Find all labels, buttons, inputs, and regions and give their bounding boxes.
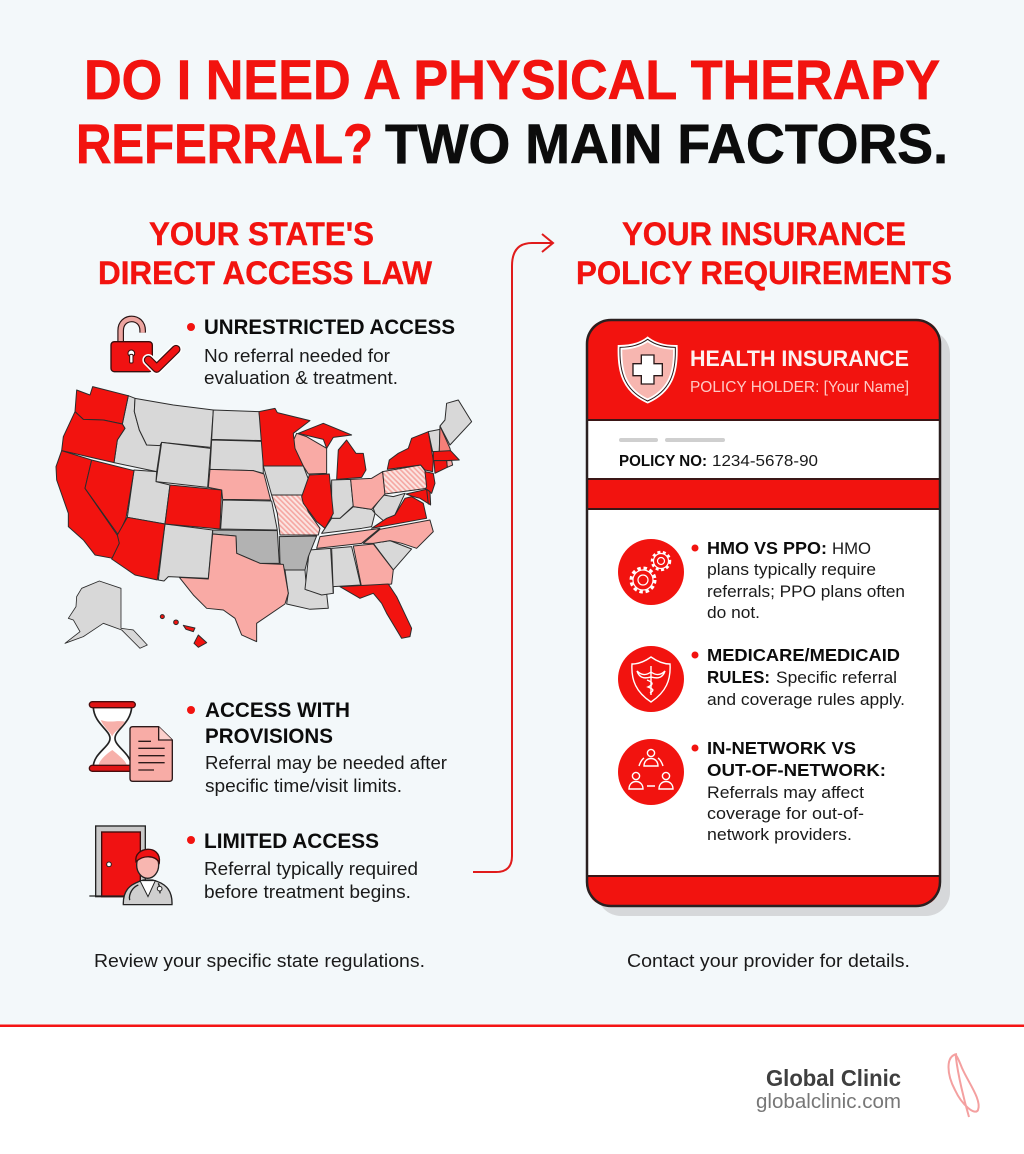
text block: Medicare/Medicaid rules: RULES: — [707, 667, 770, 687]
title: DO I NEED A PHYSICAL THERAPY — [84, 48, 940, 111]
arrow: from state law to insurance — [473, 234, 553, 872]
New Hampshire — [439, 426, 451, 452]
icon: gears — [618, 539, 684, 605]
footer brand text: globalclinic.com — [756, 1091, 901, 1113]
text block: Medicare/Medicaid rules: MEDICARE/MEDICAID — [707, 645, 900, 665]
icon: shield with caduceus — [618, 646, 684, 712]
footer brand text: Global Clinic — [766, 1065, 901, 1091]
text block: unrestricted access — [187, 316, 455, 388]
text block: access with provisions: PROVISIONS — [205, 725, 333, 748]
title: TWO MAIN FACTORS. — [385, 112, 948, 175]
title: REFERRAL? — [76, 112, 373, 175]
text block: limited access: Referral typically required — [204, 859, 418, 879]
text block: Medicare/Medicaid rules: Specific referral — [776, 669, 897, 687]
heading: state direct access law: DIRECT ACCESS LAW — [98, 255, 433, 291]
text block: unrestricted access: UNRESTRICTED ACCESS — [204, 316, 455, 339]
card header text: HEALTH INSURANCE — [690, 346, 909, 371]
policy number — [619, 438, 818, 470]
text block: access with provisions — [187, 699, 447, 796]
icon: open padlock with check — [111, 319, 176, 372]
text block: Medicare/Medicaid rules: and coverage rules apply. — [707, 691, 905, 709]
policy number: 1234-5678-90 — [712, 453, 818, 470]
panel: insurance card — [587, 320, 950, 916]
text block: HMO vs PPO: plans typically require — [707, 561, 876, 579]
footer brand text — [756, 1065, 901, 1113]
heading: insurance policy requirements: YOUR INSURANCE — [622, 216, 906, 252]
text block: in-network vs out-of-network — [692, 738, 886, 844]
heading: insurance policy requirements — [576, 216, 952, 291]
heading: state direct access law — [98, 216, 433, 291]
policy number: POLICY NO: — [619, 453, 707, 470]
text block: HMO vs PPO: referrals; PPO plans often — [707, 583, 905, 601]
text block: in-network vs out-of-network: OUT-OF-NETWORK: — [707, 760, 886, 780]
icon: shield with cross — [620, 339, 675, 401]
text block: unrestricted access: No referral needed for — [204, 346, 390, 366]
text block: in-network vs out-of-network: Referrals may affect — [707, 784, 864, 802]
text block: HMO vs PPO: do not. — [707, 604, 760, 622]
text block: Medicare/Medicaid rules — [692, 645, 905, 709]
text block: access with provisions: ACCESS WITH — [205, 699, 350, 722]
text block: access with provisions: Referral may be needed after — [205, 753, 447, 773]
note: state regulations: Review your specific state regulations. — [94, 950, 425, 971]
heading: state direct access law: YOUR STATE'S — [149, 216, 374, 252]
icon: footer signature scribble — [948, 1054, 979, 1117]
icon: door and clinician — [89, 826, 172, 905]
card shadow — [597, 330, 950, 916]
text block: HMO vs PPO: HMO VS PPO: — [707, 538, 827, 558]
icon: hourglass and document — [89, 702, 172, 781]
text block: limited access — [187, 830, 418, 902]
text block: in-network vs out-of-network: IN-NETWORK VS — [707, 738, 856, 758]
text block: in-network vs out-of-network: network providers. — [707, 826, 852, 844]
text block: HMO vs PPO: HMO — [832, 540, 871, 558]
text block: in-network vs out-of-network: coverage for out-of- — [707, 805, 864, 823]
footer band — [0, 1024, 1024, 1154]
card body — [587, 320, 940, 906]
card header text: POLICY HOLDER: [Your Name] — [690, 379, 909, 396]
text block: limited access: before treatment begins. — [204, 882, 411, 902]
card header text — [690, 346, 909, 396]
icon: network of people — [618, 739, 684, 805]
note: contact provider: Contact your provider for details. — [627, 950, 910, 971]
text block: limited access: LIMITED ACCESS — [204, 830, 379, 853]
heading: insurance policy requirements: POLICY REQUIREMENTS — [576, 255, 952, 291]
title — [76, 48, 948, 175]
map: US states by direct access — [56, 387, 472, 648]
text block: unrestricted access: evaluation & treatment. — [204, 368, 398, 388]
text block: HMO vs PPO — [692, 538, 905, 622]
text block: access with provisions: specific time/visit limits. — [205, 776, 402, 796]
